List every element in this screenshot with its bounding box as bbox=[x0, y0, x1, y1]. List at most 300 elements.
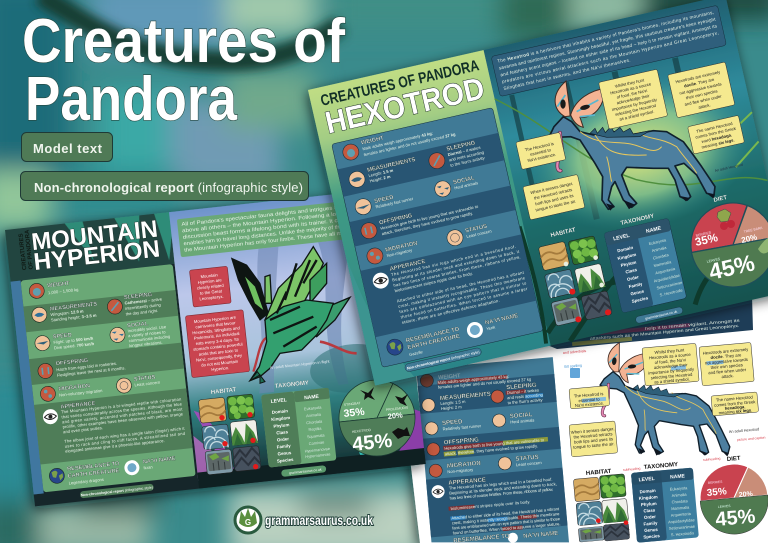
taxonomy table: LEVEL bbox=[613, 233, 631, 242]
logo: grammarsaurus: grammarsaurus.co.uk bbox=[265, 512, 373, 528]
fact boxes: yellow: attack. bbox=[698, 102, 711, 110]
fact: resemblance: RESEMBLANCE TO bbox=[405, 326, 460, 344]
panel: annotated facts: NA'VI NAME bbox=[523, 531, 559, 540]
panel: annotated facts: bioluminescent stripes ripple over its body. bbox=[450, 499, 531, 511]
panel: annotated facts: has two lines of coarse bristles. From these, ribbons of yellow, bbox=[449, 487, 554, 501]
illustration: annotated hexotrod bbox=[591, 341, 742, 467]
fact boxes: red: stomach contains powerful bbox=[193, 342, 243, 352]
taxonomy table: Seticruranimae bbox=[656, 280, 683, 291]
taxonomy table: Eukaryota bbox=[304, 404, 323, 411]
pie chart: Mountain Hyperion diet: STINGBAT bbox=[344, 401, 361, 407]
intro text box: discussion beast forms a lifelong bond with its trainer. It carries its rider and bbox=[183, 213, 387, 241]
fact boxes: yellow: selecting the Hexotrod bbox=[615, 103, 657, 117]
fact: status: STATUS bbox=[134, 375, 156, 383]
panel: annotated facts: and rests according bbox=[507, 392, 544, 400]
fact boxes on annotated page: their own species bbox=[710, 362, 743, 370]
fact: appearance: APPERANCE bbox=[60, 401, 96, 411]
fact: sleeping: to the Sun's activity bbox=[450, 155, 486, 168]
fact: social bbox=[433, 173, 479, 198]
fact boxes: yellow: comes from the Greek bbox=[695, 126, 737, 140]
taxonomy table: Order bbox=[277, 436, 289, 443]
illustration: Hexotrod bbox=[550, 81, 715, 211]
fact: sleeping: SLEEPING bbox=[446, 140, 476, 153]
intro band on annotated page: help it to remain vigilant. Amongst its bbox=[645, 318, 740, 331]
fact: sleeping: Cathemeral – active bbox=[124, 296, 163, 305]
fact: speed bbox=[354, 188, 415, 216]
fact boxes: yellow bbox=[504, 54, 751, 220]
fact boxes on annotated page: and flee when under bbox=[708, 367, 747, 375]
fact: measurements: Length: 1.5 m bbox=[368, 168, 394, 178]
panel: annotated facts: Non-migratory bbox=[447, 467, 474, 474]
panel: annotated facts bbox=[416, 357, 569, 543]
fact: appearance: uses to rack and cling to cliff faces. A streamlined tail and bbox=[64, 431, 186, 449]
taxonomy table (annotated): Eukaryota bbox=[670, 485, 688, 492]
panel: annotated facts: Relatively fast runner bbox=[442, 423, 482, 431]
fact boxes: red: to the Great bbox=[200, 288, 223, 296]
intro band on annotated page bbox=[535, 296, 753, 349]
fact: measurements: Height: 2 m bbox=[369, 174, 391, 184]
pie chart: Mountain Hyperion diet: 35% bbox=[343, 406, 366, 420]
fact boxes: yellow: Whilst they hunt bbox=[614, 77, 645, 89]
pie chart: diet (annotated): BERRIES bbox=[708, 480, 723, 485]
fact: resemblance: EARTH CREATURE bbox=[407, 334, 461, 351]
annotations on annotated page: and adverbials bbox=[563, 349, 587, 355]
main title: Creatures of bbox=[22, 7, 345, 76]
fact: resemblance: RESEMBLANCE TO bbox=[67, 461, 120, 473]
pie chart: Mountain Hyperion diet bbox=[339, 380, 415, 456]
fact: speed: Flight: up to 500 km/h bbox=[53, 336, 94, 345]
fact: measurements: MEASUREMENTS bbox=[50, 301, 98, 313]
heading: diet (annotated): DIET bbox=[727, 456, 741, 463]
fact: offspring bbox=[37, 354, 126, 380]
label: report type: Non-chronological report (infographic style) bbox=[34, 180, 303, 195]
fact boxes: red: Mountain bbox=[200, 272, 219, 279]
annotations on annotated page: subheading bbox=[623, 466, 641, 472]
panel: annotated facts: SLEEPING bbox=[506, 383, 537, 391]
fact boxes on annotated page: Hexotrods are extremely bbox=[703, 347, 749, 356]
fact boxes: red: Leonopteryx. bbox=[199, 294, 224, 301]
taxonomy table: Chordata bbox=[306, 418, 323, 425]
pie chart: Hexotrod diet: 45% bbox=[706, 249, 757, 285]
taxonomy table (annotated): S. Hexotrodis bbox=[671, 530, 694, 537]
taxonomy table (annotated): Arquenteria bbox=[671, 511, 692, 518]
fact: weight: females are lighter and do not usually exceed 37 kg bbox=[363, 131, 456, 157]
panel: annotated facts: crest, making it instantly recognisable. These thin membrane bbox=[452, 511, 560, 526]
pie chart: diet (annotated): 45% bbox=[715, 506, 757, 531]
fact: appearance: bioluminescent stripes ripple over its body. bbox=[394, 271, 473, 293]
fact: resemblance: EARTH CREATURE bbox=[68, 468, 120, 480]
fact: offspring: Hexotrods give birth to live young that are vulnerable to bbox=[380, 204, 479, 231]
label: model text: Model text bbox=[33, 141, 103, 156]
taxonomy table (annotated): Family bbox=[643, 520, 658, 527]
fact boxes on annotated page: selecting the Hexotrod bbox=[651, 372, 693, 380]
fact boxes on annotated page: Hexotrods as a source bbox=[649, 352, 692, 360]
fact boxes: red: do not eat Mountain bbox=[201, 359, 239, 368]
taxonomy table: S. Hexotrodis bbox=[659, 287, 683, 297]
panel: annotated facts: Height: 2 m bbox=[441, 404, 462, 411]
panel: annotated facts: Hexotrods give birth to live young that are vulnerable to bbox=[444, 437, 545, 451]
annotations on annotated page: picture and caption bbox=[737, 436, 766, 442]
taxonomy table: Arquidactylidae bbox=[653, 273, 680, 283]
fact: resemblance: Legendary dragons bbox=[68, 477, 104, 486]
heading: diet: DIET bbox=[713, 195, 728, 204]
fact: sleeping: SLEEPING bbox=[124, 292, 153, 301]
fact: social: longpur vibrations. bbox=[129, 340, 163, 348]
fact: na'vi name: NA'VI NAME bbox=[484, 313, 519, 326]
taxonomy table: Species bbox=[277, 457, 294, 464]
fact boxes: red: acids that are toxic to bbox=[198, 347, 239, 357]
fact boxes on annotated page: of food, the Na'vi bbox=[654, 357, 686, 365]
fact: na'vi name bbox=[465, 312, 521, 340]
fact: appearance: The Mountain Hyperion is a bi-winged reptile with colouration bbox=[61, 396, 182, 415]
fact: appearance: stature, these are an effective defence adaptation. bbox=[401, 298, 500, 325]
fact: appearance: has two lines of coarse bristles. From these, ribbons of yellow, bbox=[393, 254, 521, 288]
fact boxes: yellow: not aggressive towards bbox=[679, 81, 722, 96]
taxonomy table: Genus bbox=[277, 450, 292, 457]
fact: appearance: elongated antennae give it a phoenix-like appearance. bbox=[65, 438, 165, 454]
fact: social bbox=[109, 319, 172, 350]
intro text box: The Hexotrod is a herbivore that inhabits a variety of Pandora's biomes, including its mountains, bbox=[497, 10, 714, 64]
fact boxes on annotated page: The Hexotrod is bbox=[574, 391, 604, 399]
taxonomy table: NAME bbox=[646, 225, 662, 235]
fact boxes: yellow: Na'vi existence. bbox=[527, 152, 557, 163]
fact: speed: SPEED bbox=[374, 195, 394, 205]
fact: measurements: Wingspan: 12.9 m bbox=[50, 308, 84, 317]
taxonomy table: Phylum bbox=[273, 422, 290, 429]
taxonomy table (annotated): Kingdom bbox=[639, 494, 658, 501]
pie chart: diet (annotated): LEAVES bbox=[718, 504, 731, 509]
taxonomy table (annotated): Genus bbox=[644, 527, 659, 533]
fact: appearance: The elbow joint of each wing has a single talon (finger) which it bbox=[64, 426, 186, 444]
intro text box: Stingbats that hunt in swarms, and the Na'vi themselves. bbox=[503, 57, 631, 91]
pie chart: Hexotrod diet: 35% bbox=[694, 232, 719, 249]
fact boxes on annotated page: When it senses danger, bbox=[571, 426, 615, 435]
taxonomy table: Class bbox=[625, 267, 638, 275]
taxonomy table: Phylum bbox=[620, 260, 637, 268]
pie chart: Hexotrod diet: LEAVES bbox=[706, 257, 721, 264]
fact: weight: Male adults weigh approximately 43 kg; bbox=[362, 130, 433, 151]
fact: social: Incredibly social. Use bbox=[127, 324, 167, 333]
fact: appearance: crest, making it instantly recognisable. These thin membrane bbox=[398, 275, 526, 309]
taxonomy table (annotated): NAME bbox=[670, 473, 686, 481]
fact: social: a variety of noises to bbox=[128, 329, 166, 338]
fact boxes: red: Hexanoids, Stingbats and bbox=[192, 325, 241, 335]
fact: status bbox=[116, 374, 162, 394]
fact boxes: yellow: docile. They are bbox=[683, 77, 715, 89]
pie chart: Mountain Hyperion diet: 20% bbox=[387, 410, 403, 421]
footer pill: report type: Non-chronological report (infographic style) bbox=[407, 350, 480, 371]
label: model text bbox=[22, 132, 112, 162]
taxonomy table (annotated) bbox=[631, 468, 699, 543]
taxonomy table (annotated): Phylum bbox=[641, 501, 657, 507]
fact boxes: red: closely related bbox=[197, 283, 225, 291]
intro text box: savanna and rainforest regions. Stunningly beautiful, yet fragile, this cautious creature's keen eyesight bbox=[498, 16, 717, 71]
pie chart: Hexotrod diet bbox=[691, 203, 768, 287]
panel: annotated facts: SOCIAL bbox=[510, 412, 533, 420]
panel: annotated facts: Herd animals bbox=[510, 417, 535, 425]
pie chart: diet (annotated) bbox=[700, 464, 768, 534]
fact: appearance: fans are emblazoned with an eye pattern that is similar to bbox=[399, 280, 527, 314]
fact boxes on annotated page: both lips and uses its bbox=[574, 436, 613, 445]
fact boxes: yellow: the Hexotrod retracts bbox=[533, 187, 573, 201]
panel: annotated facts: Diurnal – it wakes bbox=[506, 387, 539, 395]
panel: annotated facts: Length: 1.5 m bbox=[440, 399, 466, 406]
fact: status bbox=[445, 222, 494, 247]
fact: appearance: APPERANCE bbox=[389, 259, 426, 273]
main title bbox=[22, 7, 345, 134]
fact boxes: yellow: as a shield symbol. bbox=[619, 109, 655, 122]
footer pill: website: grammarsaurus.co.uk bbox=[289, 468, 322, 475]
forest details bbox=[174, 233, 426, 489]
panel: annotated facts: found on butterflies. When forced to assume a larger stature, bbox=[453, 521, 561, 535]
footer pill: report type: Non-chronological report (infographic style) bbox=[81, 486, 153, 497]
taxonomy table: Genus bbox=[630, 288, 645, 297]
fact boxes on annotated page: meaning six legs. bbox=[718, 407, 752, 415]
fact: offspring: attack, therefore, they have evolved to grow rapidly. bbox=[381, 211, 473, 236]
fact: na'vi name: Yerik bbox=[486, 324, 497, 331]
illustration: Mountain Hyperion in flight bbox=[232, 247, 357, 383]
fact: migration bbox=[40, 380, 104, 402]
fact boxes: red bbox=[179, 234, 405, 378]
fact: weight: WEIGHT bbox=[361, 135, 385, 146]
intro text box bbox=[491, 5, 726, 97]
jungle background bbox=[319, 44, 768, 385]
annotations on annotated page: subheading bbox=[703, 456, 721, 462]
fact: appearance: those found on butterflies. When forced to assume a larger bbox=[400, 286, 529, 320]
fact: migration: MIGRATION bbox=[385, 241, 418, 254]
fact: sleeping bbox=[427, 139, 486, 172]
fact: migration: Non-migratory bbox=[386, 247, 413, 258]
fact boxes on annotated page: The name Hexotrod bbox=[716, 394, 754, 403]
fact: speed: Dive speed: 700 km/h bbox=[54, 341, 95, 350]
panel: annotated facts: WEIGHT bbox=[438, 373, 461, 381]
taxonomy table: Domain bbox=[272, 408, 288, 415]
fact: offspring: OFFSPRING bbox=[379, 213, 413, 226]
fact: resemblance bbox=[385, 324, 463, 362]
fact boxes on annotated page: importance by frequently bbox=[648, 366, 695, 376]
fact boxes on annotated page: Whilst they hunt bbox=[654, 347, 685, 355]
taxonomy table: Domain bbox=[617, 245, 634, 253]
fact: offspring bbox=[359, 198, 481, 241]
fact: weight bbox=[28, 279, 80, 299]
panel: annotated facts: APPERANCE bbox=[448, 477, 486, 487]
fact: na'vi name bbox=[124, 455, 177, 476]
panel: annotated facts: to the Sun's activity bbox=[507, 397, 544, 405]
fact boxes: red: Na'vi; consequently, they bbox=[196, 353, 243, 363]
footer pill: website bbox=[635, 306, 683, 324]
pie chart: diet (annotated): 35% bbox=[706, 486, 727, 499]
label: report type bbox=[20, 172, 308, 200]
fact: measurements bbox=[347, 157, 419, 189]
caption: An adult Hexotrod bbox=[714, 163, 743, 173]
fact boxes: red: Mountain Hyperion are bbox=[194, 315, 237, 324]
intro band on annotated page: attackers such as the Mountain Hyperion and Great Leonopteryx. bbox=[590, 323, 740, 341]
fact: social: SOCIAL bbox=[127, 321, 149, 329]
fact: sleeping: the day and night. bbox=[126, 308, 158, 316]
taxonomy table (annotated): Mammalia bbox=[671, 504, 690, 511]
fact boxes on annotated page: the Hexotrod retracts bbox=[573, 431, 613, 440]
fact: social: SOCIAL bbox=[453, 175, 476, 186]
intro text box: and feathery scent organs – located on either side of its head – help it to remain vigilant. Amongst its bbox=[500, 23, 718, 77]
taxonomy table (annotated): LEVEL bbox=[638, 476, 655, 483]
title: Mountain Hyperion: OF PANDORA bbox=[25, 229, 35, 270]
fact boxes on annotated page: tongue to taste the air. bbox=[573, 441, 615, 450]
fact boxes: red: Hyperion. bbox=[211, 365, 229, 372]
intro text box: above all others – the Mountain Hyperion. Following a long and dangerous bbox=[182, 206, 387, 234]
fact boxes on annotated page: hexadoga, bbox=[725, 404, 746, 411]
logo: grammarsaurus bbox=[235, 507, 373, 533]
fact: appearance: that varies considerably across the species. Although the blue bbox=[61, 401, 183, 419]
pie chart: Hexotrod diet: 20% bbox=[740, 233, 758, 245]
taxonomy table: Kingdom bbox=[617, 252, 637, 261]
habitat tiles bbox=[198, 394, 261, 475]
taxonomy table: Hypernanovae bbox=[305, 451, 331, 459]
taxonomy table: Mammalia bbox=[653, 259, 673, 268]
heading: habitat: HABITAT bbox=[211, 387, 237, 396]
fact boxes: red: Hyperion are bbox=[198, 277, 223, 285]
page base bbox=[308, 0, 768, 385]
fact: appearance: and green variety, accented with patches of black, are most bbox=[62, 406, 183, 424]
panel: annotated facts: Attached to either side of its head, the Hexotrod has a vibrant bbox=[451, 506, 560, 521]
pie chart: Mountain Hyperion diet: PROLEMURIS bbox=[386, 406, 409, 412]
fact boxes on annotated page: acknowledge their bbox=[654, 362, 688, 370]
pie chart: Hexotrod diet: BERRIES bbox=[695, 230, 712, 238]
fact: sleeping bbox=[106, 291, 164, 318]
fact boxes: yellow: of food, the Na'vi bbox=[616, 88, 648, 100]
fact: na'vi name: NA'VI NAME bbox=[143, 456, 176, 465]
fact boxes: red: eats every 3-4 days. Its bbox=[195, 336, 239, 346]
sheet: Mountain Hyperion report bbox=[5, 188, 426, 506]
panel: annotated facts: attack, therefore, they have evolved to grow rapidly. bbox=[445, 443, 538, 456]
taxonomy table: Hypernanovae bbox=[304, 446, 330, 454]
fact boxes on annotated page: essential to bbox=[578, 396, 600, 403]
intro text box: predators are vicious aerial attackers such as the Mountain Hyperion and Great Leonopteryx, bbox=[501, 30, 719, 84]
fact: migration bbox=[365, 238, 420, 266]
fact: weight bbox=[341, 120, 456, 162]
main title: Pandora bbox=[25, 65, 237, 134]
taxonomy table bbox=[261, 388, 336, 468]
taxonomy table: Animalia bbox=[306, 412, 322, 418]
habitat tiles bbox=[538, 236, 612, 326]
panel: annotated facts: Male adults weigh approximately 43 kg; bbox=[437, 374, 509, 385]
fact: sleeping: Diurnal – it wakes bbox=[447, 145, 481, 157]
fact: resemblance bbox=[49, 461, 122, 488]
panel: Mountain Hyperion facts bbox=[21, 264, 196, 492]
taxonomy table: Species bbox=[631, 295, 649, 304]
fact boxes: yellow: both lips and uses its bbox=[535, 193, 574, 206]
panel: annotated facts: OFFSPRING bbox=[444, 437, 479, 446]
footer pill: website: grammarsaurus.co.uk bbox=[645, 309, 678, 321]
fact boxes: yellow: The Hexotrod is bbox=[524, 141, 554, 152]
taxonomy table: Cornivae bbox=[308, 439, 324, 446]
fact: social: communicate including bbox=[128, 334, 171, 343]
page base bbox=[5, 188, 426, 506]
fact: measurements: MEASUREMENTS bbox=[367, 157, 416, 174]
title: Mountain Hyperion: HYPERION bbox=[32, 235, 161, 276]
title: Mountain Hyperion: CREATURES bbox=[18, 233, 28, 270]
panel: annotated facts: Beginning at its slender neck and extending down to back, bbox=[449, 481, 557, 496]
fact: appearance: prolific, other examples have been observed with yellow, orange bbox=[62, 411, 184, 429]
fact boxes: yellow: Hexotrods as a source bbox=[610, 81, 652, 96]
fact: appearance: and even pink scales. bbox=[63, 425, 103, 434]
fact boxes: yellow: Hexotrods are extremely bbox=[675, 69, 721, 84]
annotations on annotated page: An adult Hexotrod bbox=[729, 427, 759, 434]
sheet: Hexotrod report bbox=[308, 0, 768, 385]
intro text box bbox=[177, 196, 394, 257]
taxonomy table: Chordata bbox=[652, 252, 670, 261]
taxonomy table (annotated): Seticruranimae bbox=[669, 524, 695, 531]
fact boxes: yellow: acknowledge their bbox=[616, 93, 651, 105]
fact: na'vi name: Ikran bbox=[143, 464, 154, 470]
fact boxes on annotated page: Na'vi existence. bbox=[575, 401, 604, 408]
taxonomy table (annotated): Class bbox=[643, 507, 656, 514]
taxonomy table: Order bbox=[627, 274, 640, 282]
sheet: Hexotrod report draft (white annotated page) bbox=[396, 288, 768, 543]
taxonomy table (annotated): Domain bbox=[639, 488, 656, 494]
fact: social: Herd animals bbox=[454, 180, 478, 190]
panel: annotated facts: females are lighter and do not usually exceed 37 kg bbox=[438, 377, 532, 390]
annotations on annotated page bbox=[563, 349, 766, 472]
fact: migration: Non-voluntary migration bbox=[59, 388, 103, 398]
fact: speed: Relatively fast runner bbox=[375, 196, 414, 209]
fact boxes on annotated page: not aggressive towards bbox=[705, 357, 748, 366]
taxonomy table: Family bbox=[276, 443, 291, 450]
fact boxes on annotated page: as a shield symbol. bbox=[654, 376, 690, 385]
fact boxes: yellow: When it senses danger, bbox=[530, 181, 574, 195]
pie chart: Hexotrod diet: TREE BARK bbox=[743, 226, 764, 234]
title: Mountain Hyperion: MOUNTAIN bbox=[30, 216, 159, 256]
fact boxes on annotated page: attack. bbox=[721, 373, 734, 379]
fact boxes: yellow: their own species bbox=[685, 88, 718, 100]
fact boxes: yellow: word hexadoga, bbox=[701, 132, 732, 144]
footer pill: website bbox=[281, 465, 326, 477]
fact: appearance bbox=[42, 391, 187, 456]
fact: weight: 1,000 – 1,500 kg bbox=[48, 287, 79, 295]
taxonomy table: Reptilia bbox=[308, 426, 323, 432]
taxonomy table: Class bbox=[276, 429, 289, 436]
fact: migration: MIGRATION bbox=[58, 383, 90, 393]
panel: annotated facts: fans are emblazoned with an eye pattern that is similar to those bbox=[452, 516, 561, 530]
fact: status: Least concern bbox=[134, 380, 161, 387]
heading: taxonomy (annotated): TAXONOMY bbox=[644, 462, 678, 471]
habitat tiles (annotated) bbox=[573, 474, 630, 542]
fact: sleeping: and rests according bbox=[448, 149, 485, 162]
taxonomy table (annotated): Arquidactylidae bbox=[668, 517, 695, 524]
fact boxes on annotated page: comes from the Greek bbox=[714, 399, 756, 408]
panel: annotated facts: STATUS bbox=[515, 455, 539, 463]
fact boxes: yellow: importance by frequently bbox=[611, 97, 658, 112]
heading: taxonomy: TAXONOMY bbox=[620, 214, 655, 227]
fact boxes: yellow: meaning six legs. bbox=[701, 137, 735, 150]
taxonomy table (annotated): Animalia bbox=[671, 492, 688, 498]
taxonomy table: Eukaryota bbox=[648, 237, 667, 246]
pie chart: Mountain Hyperion diet: 45% bbox=[351, 430, 394, 456]
heading: taxonomy: TAXONOMY bbox=[275, 380, 309, 390]
fact boxes: yellow: essential to bbox=[530, 147, 552, 157]
panel: annotated facts: Least concern bbox=[516, 460, 543, 467]
fact boxes on annotated page bbox=[569, 342, 759, 457]
fact: measurements bbox=[31, 301, 99, 325]
taxonomy table: Arquenteria bbox=[655, 266, 676, 275]
logo: grammarsaurus: G bbox=[245, 518, 251, 527]
fact boxes: yellow: tongue to taste the air. bbox=[535, 198, 577, 213]
fact: offspring: Fledglings leave the nest at 6 months. bbox=[57, 365, 126, 378]
pie chart: Mountain Hyperion diet: HEXOTROD bbox=[352, 428, 372, 434]
taxonomy table: LEVEL bbox=[270, 397, 287, 405]
fact boxes: yellow: The name Hexotrod bbox=[696, 121, 734, 134]
fact: speed bbox=[34, 330, 95, 352]
fact: speed: SPEED bbox=[53, 332, 72, 340]
